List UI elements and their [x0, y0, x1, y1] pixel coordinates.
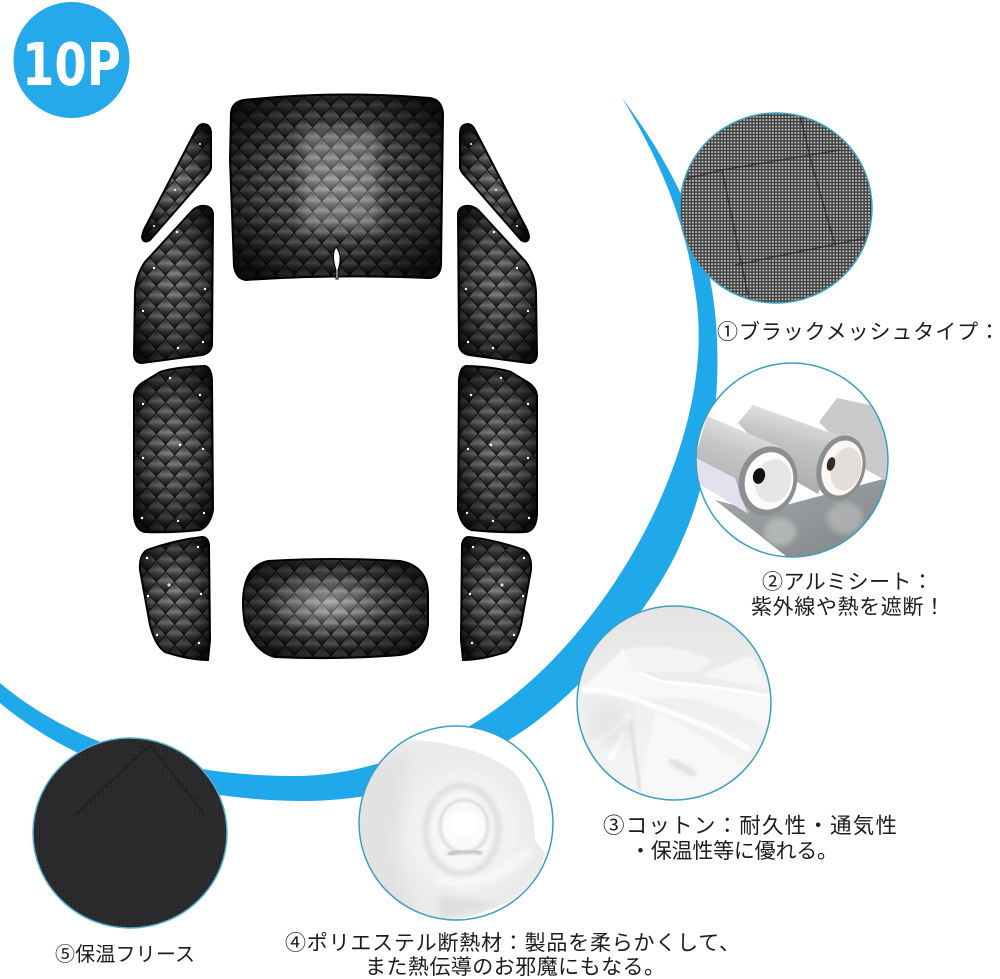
label 2 — [751, 571, 945, 619]
label 2: 紫外線や熱を遮断！ — [751, 596, 945, 619]
label 1: ①ブラックメッシュタイプ： — [717, 321, 1000, 344]
panel: left middle window shade — [134, 366, 213, 532]
photo circle 4: polyester insulation roll — [355, 726, 553, 925]
panel: windshield shade — [230, 94, 443, 280]
label 3 — [603, 814, 897, 863]
badge: 10P — [14, 2, 130, 118]
label 4: ④ポリエステル断熱材：製品を柔らかくして、 — [285, 932, 740, 955]
panel: right rear window shade — [461, 537, 531, 660]
label 5: ⑤保温フリース — [55, 943, 195, 966]
label 3: ・保温性等に優れる。 — [630, 840, 838, 863]
panel: back window shade — [243, 559, 428, 658]
panel: left rear window shade — [140, 537, 210, 660]
blue curved band — [0, 98, 717, 801]
panel: left front window shade — [134, 206, 213, 363]
label 3: ③コットン：耐久性・通気性 — [603, 814, 897, 838]
panel: left quarter triangle shade — [142, 124, 211, 241]
photo circle 5: fleece — [33, 738, 227, 928]
panel: right middle window shade — [458, 366, 537, 532]
photo circle 1: black mesh — [680, 113, 880, 303]
photo circle 2: aluminium rolls — [696, 363, 890, 560]
panel: right front window shade — [458, 206, 537, 363]
label 2: ②アルミシート： — [762, 571, 933, 594]
label 4: また熱伝導のお邪魔にもなる。 — [365, 956, 665, 979]
label 4 — [285, 932, 740, 979]
badge: 10P: 10P — [22, 30, 121, 99]
panel: right quarter triangle shade — [460, 124, 529, 241]
photo circle 3: cotton — [577, 606, 771, 800]
